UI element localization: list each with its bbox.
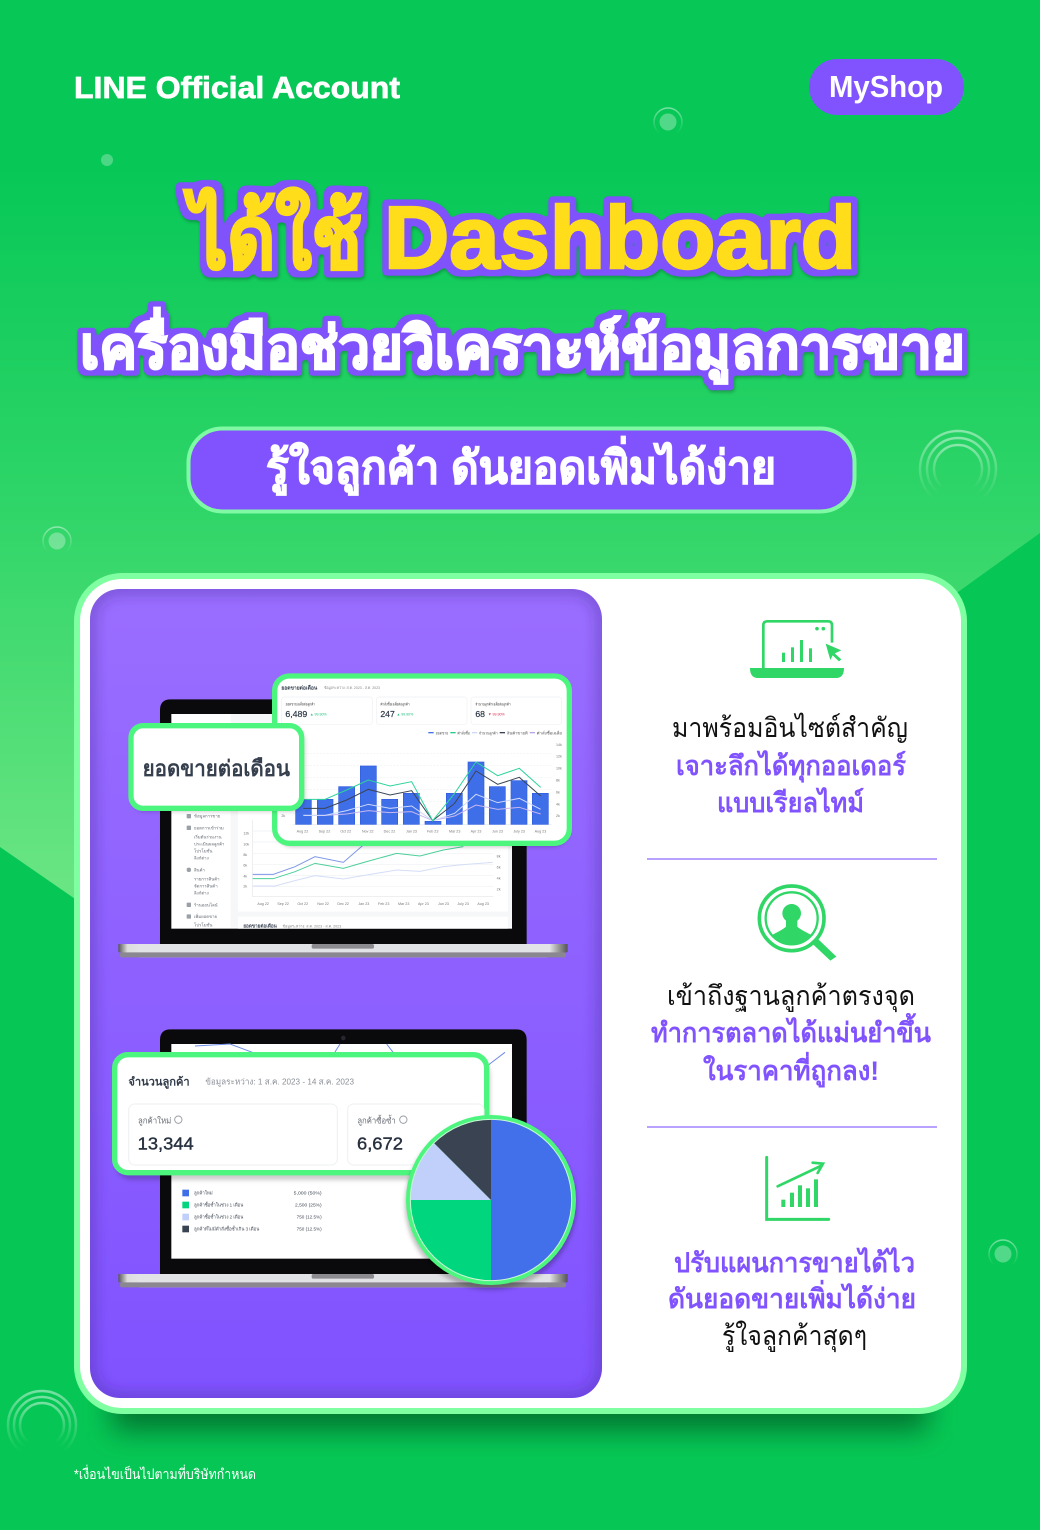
customer legend list: 2,500 (25%) bbox=[295, 1203, 322, 1208]
laptop 1 line chart: Dec 22 bbox=[337, 902, 349, 906]
bar chart: Oct 22 bbox=[340, 830, 351, 834]
laptop 1 sidebar: เริ่มต้นร่วมงาน bbox=[194, 833, 222, 839]
title line 2: เครื่องมือช่วยวิเคราะห์ข้อมูลการขาย bbox=[80, 307, 965, 384]
laptop 1 line chart: Jan 23 bbox=[358, 902, 369, 906]
laptop 1 line chart: July 23 bbox=[457, 902, 469, 906]
bar chart: 14k bbox=[556, 743, 562, 747]
laptop 1 line chart: Mar 23 bbox=[398, 902, 409, 906]
laptop 1 sidebar bbox=[187, 814, 225, 928]
text block 2: ทำการตลาดได้แม่นยำขึ้น bbox=[651, 1012, 931, 1048]
subtitle pill bbox=[188, 428, 854, 512]
laptop 1 line chart: ยอดขายต่อเดือน bbox=[243, 922, 278, 928]
laptop 1 line chart: Aug 22 bbox=[257, 902, 269, 906]
laptop 1 line chart: Apr 23 bbox=[418, 902, 429, 906]
laptop 1 line chart: 6k bbox=[497, 865, 501, 869]
bar chart: 8k bbox=[556, 778, 560, 782]
laptop 1 sidebar: ลิงก์ต่าง bbox=[194, 856, 209, 861]
laptop 1 line chart: 12k bbox=[243, 832, 249, 836]
chart legend: คำสั่งซื้อเฉลี่ย bbox=[537, 730, 562, 735]
bar chart: 12k bbox=[556, 755, 562, 759]
text block 1: มาพร้อมอินไซต์สำคัญ bbox=[672, 712, 908, 743]
laptop 1 body bbox=[118, 699, 568, 957]
bar chart bbox=[281, 743, 562, 834]
bar chart: 2k bbox=[556, 814, 560, 818]
MyShop badge: MyShop bbox=[829, 69, 943, 104]
customer legend list: ลูกค้าใหม่ bbox=[194, 1190, 213, 1197]
laptop 1 sidebar: โปรโมชั่น bbox=[194, 922, 213, 928]
customers count card: จำนวนลูกค้า bbox=[128, 1074, 190, 1089]
icon: growth chart bbox=[767, 1157, 829, 1219]
text block 3: ปรับแผนการขายได้ไว bbox=[674, 1247, 915, 1278]
laptop 2 body bbox=[118, 1029, 568, 1287]
bar chart: Mar 23 bbox=[449, 830, 460, 834]
laptop 1 line chart: 4k bbox=[243, 874, 247, 878]
text block 1 bbox=[672, 712, 908, 818]
subtitle pill: รู้ใจลูกค้า ดันยอดเพิ่มได้ง่าย bbox=[266, 436, 776, 496]
sales chart card bbox=[275, 676, 569, 847]
bar chart: Jan 23 bbox=[406, 830, 417, 834]
KPI tiles: จำนวนลูกค้าเฉลี่ยต่อลูกค้า bbox=[475, 701, 511, 706]
KPI tiles: ▼ 99.90% bbox=[488, 712, 505, 716]
customers count card: ลูกค้าใหม่ bbox=[138, 1115, 171, 1126]
laptop 1 line chart: 8k bbox=[243, 853, 247, 857]
bar chart: Sep 22 bbox=[319, 830, 330, 834]
laptop 1 sidebar: โปรโมชั่น bbox=[194, 847, 213, 853]
chart legend bbox=[428, 730, 562, 735]
customer legend list bbox=[182, 1190, 322, 1233]
text block 3: รู้ใจลูกค้าสุดๆ bbox=[722, 1320, 867, 1353]
icon: laptop with chart and cursor bbox=[750, 621, 844, 678]
text block 3 bbox=[668, 1247, 916, 1353]
text block 1: เจาะลึกได้ทุกออเดอร์ bbox=[676, 750, 906, 783]
chart legend: คำสั่งซื้อ bbox=[457, 730, 470, 735]
bar chart: Dec 22 bbox=[384, 830, 395, 834]
laptop 1 line chart: Oct 22 bbox=[297, 902, 308, 906]
divider 1 bbox=[647, 858, 937, 860]
KPI tiles bbox=[282, 697, 562, 724]
title line 1: Dashboard bbox=[384, 188, 856, 287]
MyShop badge bbox=[809, 59, 964, 115]
KPI tiles: คำสั่งซื้อเฉลี่ยต่อลูกค้า bbox=[380, 701, 410, 706]
laptop 1: monthly sales bbox=[118, 676, 569, 957]
icon: magnifier with person bbox=[759, 886, 836, 961]
bar chart: 4k bbox=[556, 802, 560, 806]
bar chart: July 23 bbox=[513, 830, 525, 834]
customers count card: 13,344 bbox=[138, 1133, 194, 1153]
text block 2: ในราคาที่ถูกลง! bbox=[703, 1051, 879, 1088]
bar chart: Aug 22 bbox=[297, 830, 308, 834]
laptop 1 line chart: Aug 23 bbox=[477, 902, 489, 906]
main panel bbox=[77, 576, 964, 1411]
bar chart: Jun 23 bbox=[492, 830, 503, 834]
monthly sales label card bbox=[131, 726, 305, 812]
laptop 1 line chart: Feb 23 bbox=[378, 902, 389, 906]
pie chart bbox=[405, 1115, 577, 1290]
laptop 1 line chart: Jun 23 bbox=[438, 902, 449, 906]
text block 1: แบบเรียลไทม์ bbox=[717, 787, 864, 818]
laptop 1 line chart: 2k bbox=[497, 887, 501, 891]
KPI tiles: 6,489 bbox=[285, 709, 308, 719]
sales chart card: ข้อมูลระหว่าง: ส.ค. 2023 - ส.ค. 2023 bbox=[324, 685, 380, 690]
chart legend: สินค้าขายดี bbox=[506, 730, 528, 735]
customers count card bbox=[115, 1055, 490, 1180]
KPI tiles: ▲ 99.90% bbox=[310, 712, 327, 716]
laptop 1 sidebar: เพิ่มยอดขาย bbox=[194, 913, 218, 919]
text block 2 bbox=[651, 981, 931, 1088]
bar chart: Feb 23 bbox=[427, 830, 438, 834]
chart legend: ยอดขาย bbox=[436, 731, 448, 735]
text block 3: ดันยอดขายเพิ่มได้ง่าย bbox=[668, 1279, 916, 1314]
title line 1: ได้ใช้ bbox=[183, 187, 362, 287]
customer legend list: 5,000 (50%) bbox=[294, 1191, 322, 1196]
laptop 1 sidebar: ลิงก์ต่าง bbox=[194, 891, 209, 896]
laptop 1 line chart: ข้อมูลระหว่าง: ส.ค. 2023 - ส.ค. 2023 bbox=[283, 923, 341, 928]
laptop 1 line chart: 8k bbox=[497, 854, 501, 858]
brand name: LINE Official Account bbox=[74, 70, 400, 105]
laptop 1 line chart: 10k bbox=[243, 842, 249, 846]
purple showcase panel bbox=[90, 589, 602, 1398]
customer legend list: 750 (12.5%) bbox=[297, 1215, 322, 1220]
laptop 1 sidebar: ประเมินผลลูกค้า bbox=[194, 841, 225, 847]
title line 1 bbox=[183, 187, 856, 287]
customer legend list: ลูกค้าซื้อซ้ำในช่วง 2 เดือน bbox=[194, 1214, 244, 1221]
customer legend list: ลูกค้าซื้อซ้ำในช่วง 1 เดือน bbox=[194, 1202, 244, 1209]
bar chart: Aug 23 bbox=[535, 830, 546, 834]
KPI tiles: 68 bbox=[475, 709, 485, 719]
laptop 1 line chart: Sep 22 bbox=[277, 902, 289, 906]
customers count card: ลูกค้าซื้อซ้ำ bbox=[357, 1114, 396, 1126]
laptop 1 sidebar: ร้านออนไลน์ bbox=[194, 902, 218, 907]
chart legend: จำนวนลูกค้า bbox=[479, 730, 498, 735]
bar chart: Nov 22 bbox=[362, 830, 374, 834]
laptop 1 line chart: Nov 22 bbox=[317, 902, 329, 906]
customers count card: 6,672 bbox=[357, 1133, 403, 1153]
laptop 1 line chart: 4k bbox=[497, 876, 501, 880]
bar chart: 2k bbox=[281, 814, 285, 818]
laptop 1 sidebar: ยอดการเข้าร่วม bbox=[194, 825, 224, 830]
text block 2: เข้าถึงฐานลูกค้าตรงจุด bbox=[667, 981, 915, 1013]
KPI tiles: 247 bbox=[380, 709, 395, 719]
laptop 1 sidebar: จัดการสินค้า bbox=[194, 883, 218, 888]
customers count card: ข้อมูลระหว่าง: 1 ส.ค. 2023 - 14 ส.ค. 2023 bbox=[205, 1077, 354, 1088]
laptop 1 line chart: 2k bbox=[243, 885, 247, 889]
laptop 1 line chart bbox=[243, 820, 501, 928]
customer legend list: 750 (12.5%) bbox=[297, 1227, 322, 1232]
footnote: *เงื่อนไขเป็นไปตามที่บริษัทกำหนด bbox=[74, 1465, 256, 1482]
sales chart card: ยอดขายต่อเดือน bbox=[281, 684, 318, 691]
laptop 1 line chart: 6k bbox=[243, 864, 247, 868]
panel shadow bbox=[112, 1385, 928, 1431]
divider 2 bbox=[647, 1126, 937, 1128]
laptop 2: customers bbox=[115, 1029, 577, 1290]
laptop 1 sidebar: รายการสินค้า bbox=[194, 876, 220, 881]
customer legend list: ลูกค้าที่ไม่มีคำสั่งซื้อซ้ำเกิน 3 เดือน bbox=[194, 1226, 260, 1233]
laptop 1 sidebar: ข้อมูลการขาย bbox=[194, 814, 221, 820]
monthly sales label card: ยอดขายต่อเดือน bbox=[143, 756, 290, 781]
KPI tiles: ▲ 99.90% bbox=[397, 712, 414, 716]
bar chart: Apr 23 bbox=[471, 830, 481, 834]
bar chart: 10k bbox=[556, 767, 562, 771]
KPI tiles: ยอดขายเฉลี่ยต่อลูกค้า bbox=[286, 701, 315, 706]
laptop 1 sidebar: สินค้า bbox=[194, 867, 205, 872]
bar chart: 6k bbox=[556, 790, 560, 794]
